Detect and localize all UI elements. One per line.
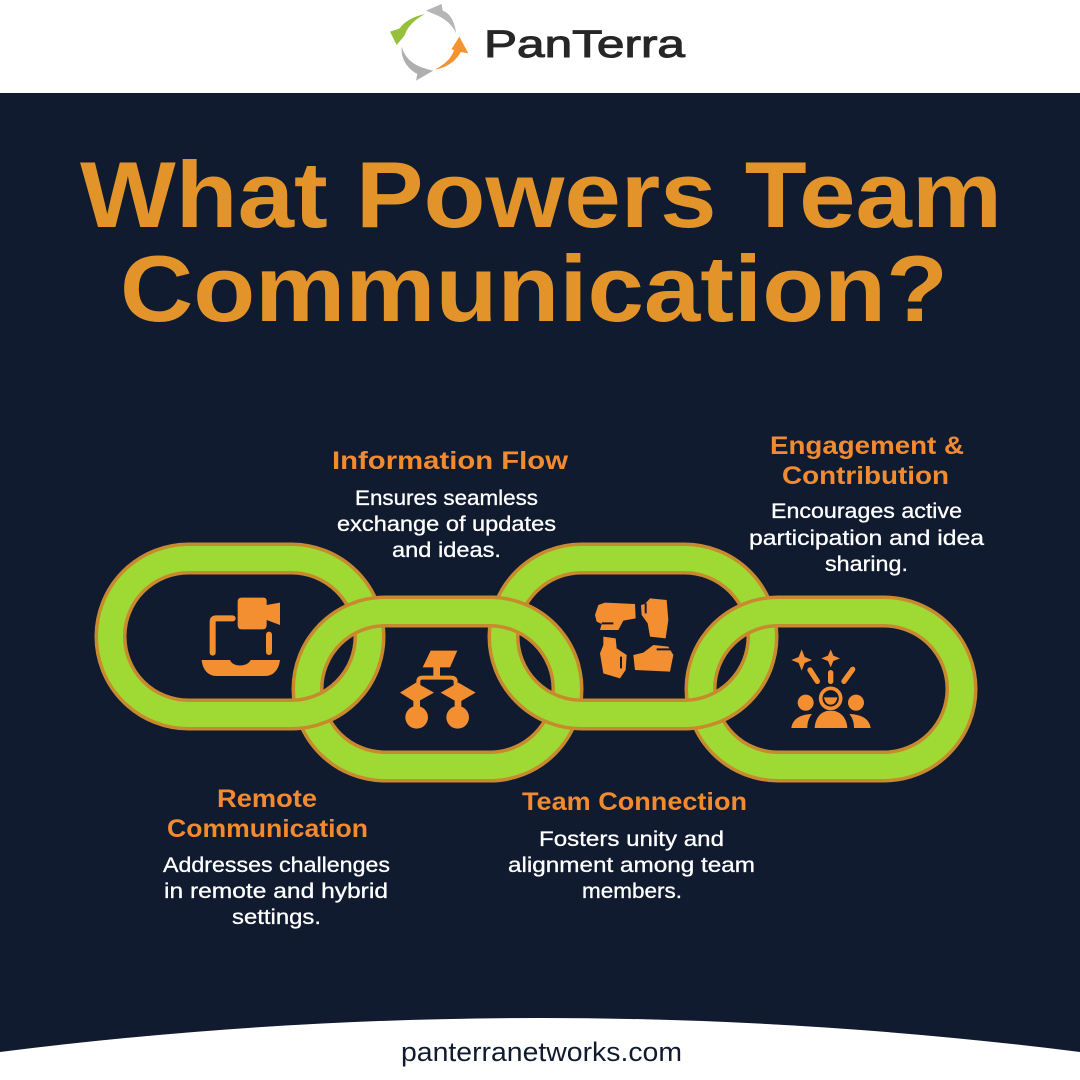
icon: engaged team with sparkles [791, 649, 871, 728]
icon: laptop with video camera [202, 598, 280, 676]
text: Remote Communication [163, 785, 390, 929]
text: Engagement & Contribution: sharing. [825, 553, 908, 576]
title [80, 142, 1002, 341]
footer website: panterranetworks.com [401, 1037, 682, 1067]
text: Remote Communication: Addresses challenges [163, 854, 390, 877]
text: Engagement & Contribution [749, 432, 984, 576]
text: Information Flow: Ensures seamless [355, 487, 538, 510]
text: Engagement & Contribution: participation and idea [749, 527, 984, 550]
logo [390, 4, 686, 81]
text: Team Connection: members. [582, 880, 682, 903]
text: Remote Communication: settings. [232, 906, 321, 929]
text: Information Flow: Information Flow [332, 447, 569, 475]
icon: flow chart [400, 651, 476, 729]
icon: logo arrows [390, 4, 468, 81]
text: Engagement & Contribution: Engagement & [770, 432, 964, 460]
text: Team Connection: Fosters unity and [539, 828, 724, 851]
logo wordmark: PanTerra [484, 24, 686, 66]
text: Remote Communication: Communication [167, 815, 368, 843]
text: Engagement & Contribution: Encourages active [771, 500, 962, 523]
text: Remote Communication: Remote [217, 785, 317, 813]
interlocking chain [110, 558, 962, 766]
text: Team Connection: Team Connection [522, 788, 747, 816]
title: What Powers Team [80, 142, 1002, 247]
text: Team Connection [508, 788, 755, 903]
text: Team Connection: alignment among team [508, 854, 755, 877]
text: Remote Communication: in remote and hybrid [164, 880, 388, 903]
text: Information Flow: exchange of updates [337, 513, 556, 536]
text: Engagement & Contribution: Contribution [782, 462, 949, 490]
text: Information Flow [332, 447, 569, 562]
icon: four hands joined [595, 598, 673, 678]
title: Communication? [120, 236, 948, 341]
text: Information Flow: and ideas. [392, 539, 501, 562]
